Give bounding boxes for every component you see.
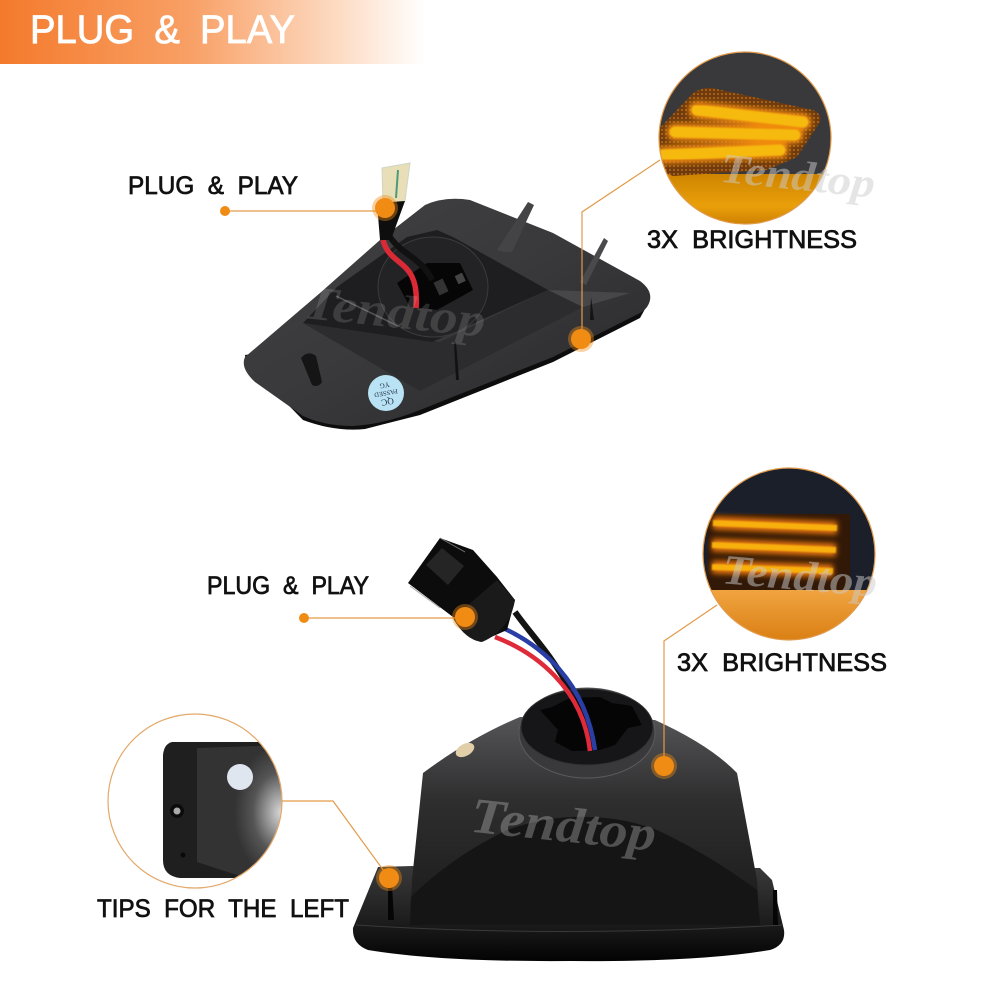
leader dots — [220, 195, 677, 891]
peg — [301, 353, 322, 386]
red wire — [495, 637, 590, 751]
plug stub — [377, 201, 405, 240]
label: tips for the left: TIPS FOR THE LEFT — [97, 895, 349, 923]
red wire — [383, 240, 416, 308]
amber lens callout, top — [655, 48, 835, 228]
plug board — [382, 163, 410, 204]
collar — [519, 688, 655, 778]
upper watermark: Tendtop — [302, 276, 488, 348]
QC sticker — [368, 375, 404, 411]
socket hole — [397, 263, 473, 310]
header banner — [0, 0, 425, 64]
leader lines — [225, 160, 717, 878]
sticker — [453, 740, 477, 760]
connector body — [408, 538, 515, 642]
right slot — [773, 890, 778, 925]
label: plug and play, top: PLUG & PLAY — [128, 172, 298, 200]
lower watermark: Tendtop — [468, 787, 659, 862]
black wire — [515, 612, 570, 690]
amber lens callout, bottom — [700, 465, 880, 645]
watermarks on lens circles: Tendtop — [718, 146, 877, 208]
QC sticker: YG — [379, 380, 390, 390]
upper lamp photo — [244, 163, 650, 430]
black wire — [390, 237, 432, 280]
top plateau — [303, 230, 548, 342]
fins — [497, 202, 534, 252]
ridge highlight — [548, 290, 630, 307]
watermarks on lens circles — [718, 146, 879, 607]
QC sticker: PASSED — [373, 387, 398, 398]
QC sticker: QC — [381, 396, 395, 408]
left-mark detail callout — [108, 714, 290, 888]
blue wire — [503, 628, 595, 750]
lamp flange — [353, 866, 784, 961]
flange lower lip — [245, 300, 650, 430]
header banner: PLUG & PLAY — [30, 8, 295, 52]
dome body — [410, 717, 760, 925]
left slot — [388, 885, 394, 920]
lower lamp photo — [353, 538, 784, 961]
label: brightness, bottom: 3X BRIGHTNESS — [677, 649, 887, 677]
lamp base flange — [244, 199, 650, 426]
socket ring — [378, 237, 488, 337]
watermarks on lens circles: Tendtop — [721, 547, 879, 607]
front face — [303, 290, 583, 391]
front panel — [410, 817, 760, 925]
label: brightness, top: 3X BRIGHTNESS — [647, 226, 857, 254]
socket hole — [540, 697, 642, 751]
circle outline, bottom — [703, 468, 875, 640]
label: plug and play, bottom: PLUG & PLAY — [207, 572, 369, 600]
circle outline, top — [659, 52, 831, 224]
